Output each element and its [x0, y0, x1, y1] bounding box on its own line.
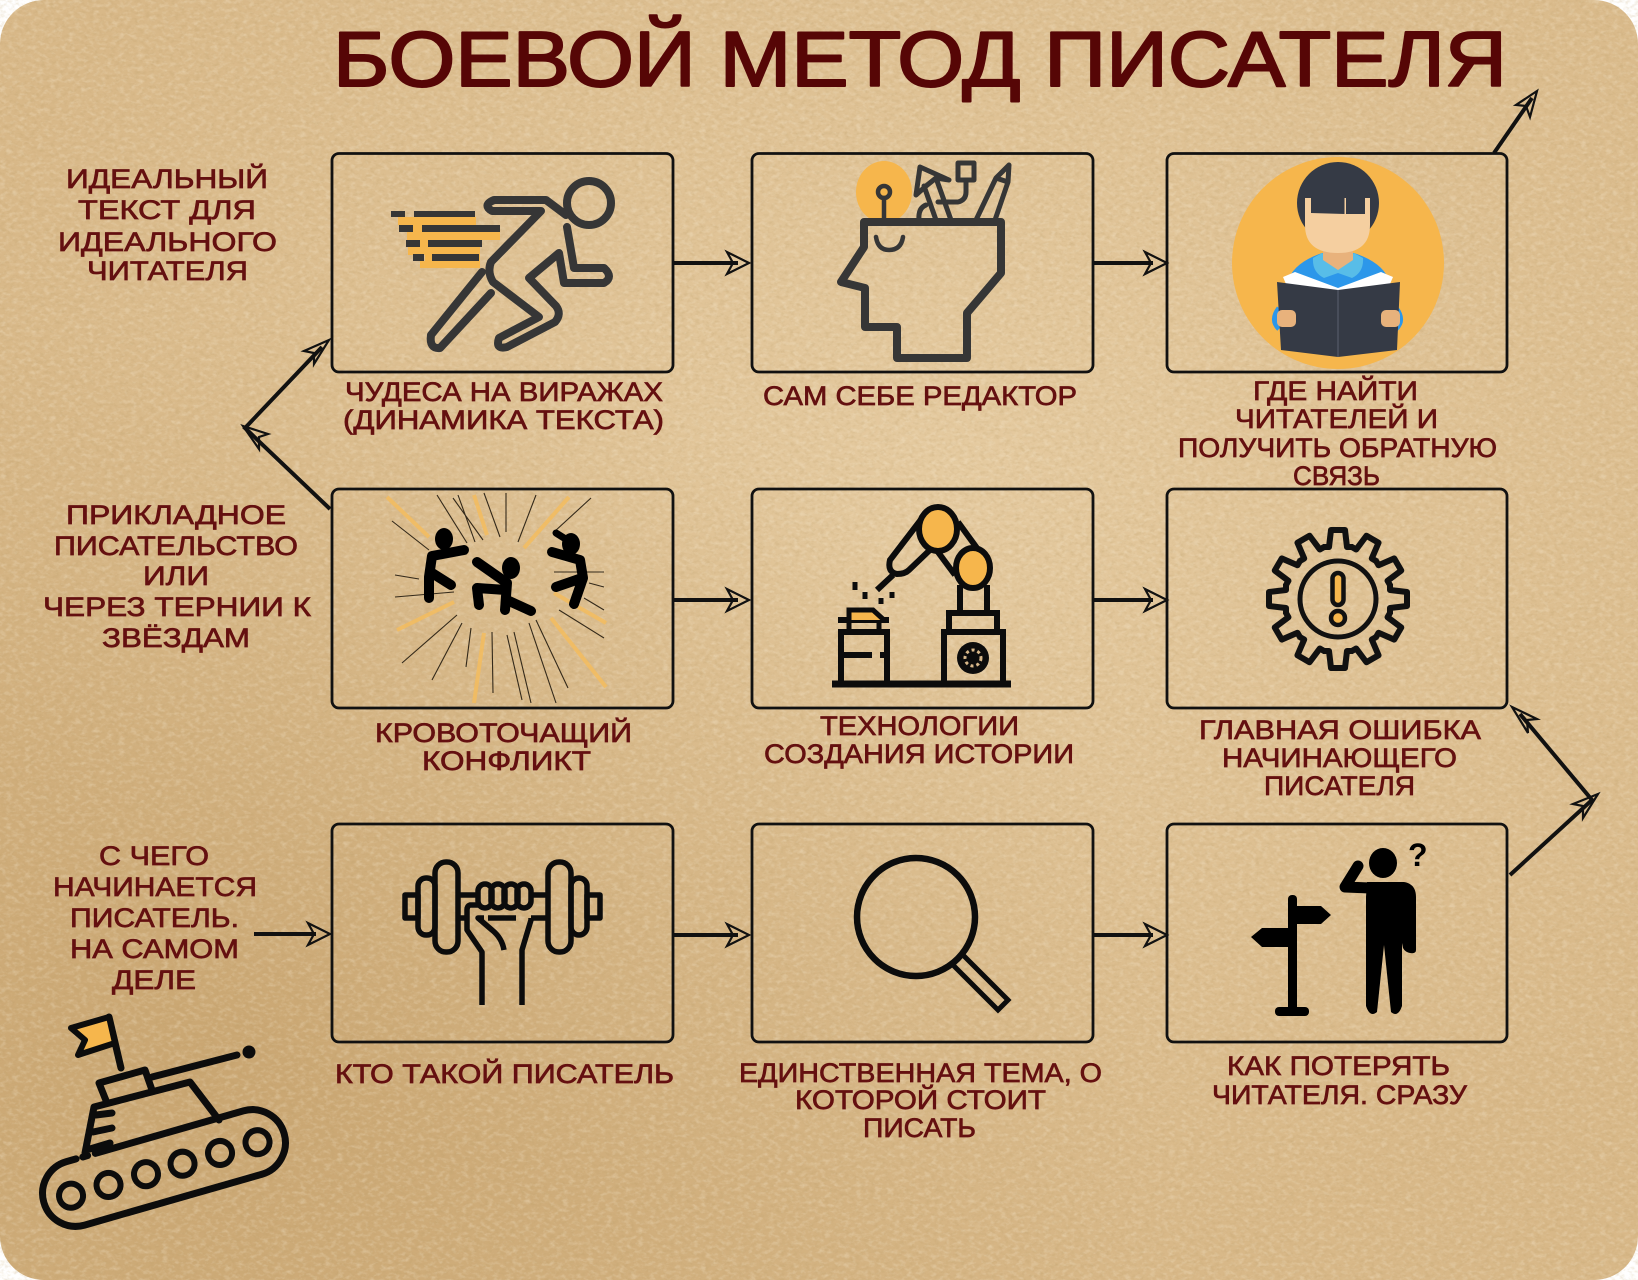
text: left label row 1: ИДЕАЛЬНЫЙ — [66, 163, 268, 194]
captions row 1: (ДИНАМИКА ТЕКСТА) — [343, 405, 664, 435]
title: БОЕВОЙ МЕТОД ПИСАТЕЛЯ — [333, 15, 1507, 103]
text: left label row 3: НА САМОМ — [70, 934, 239, 964]
captions row 3: ЧИТАТЕЛЯ. СРАЗУ — [1212, 1080, 1468, 1110]
captions row 2: КОНФЛИКТ — [422, 746, 591, 776]
captions row 2: ТЕХНОЛОГИИ — [820, 711, 1019, 741]
panel: чудеса на виражах — [332, 154, 673, 372]
icon: reader — [1232, 157, 1444, 369]
panel: кровоточащий конфликт — [332, 489, 673, 708]
text: left label row 2: ПРИКЛАДНОЕ — [66, 500, 286, 530]
panel: где найти читателей — [1167, 154, 1507, 372]
panel: как потерять читателя — [1167, 824, 1507, 1042]
text: left label row 2: ЧЕРЕЗ ТЕРНИИ К — [43, 592, 311, 622]
text: left label row 2: ИЛИ — [143, 561, 209, 591]
text: left label row 1: ТЕКСТ ДЛЯ — [78, 195, 256, 225]
text: left label row 2: ЗВЁЗДАМ — [102, 623, 250, 653]
icon: head with tools — [841, 161, 1009, 358]
captions row 2: НАЧИНАЮЩЕГО — [1222, 743, 1457, 773]
captions row 3: ПИСАТЬ — [863, 1113, 976, 1143]
text: left label row 3: НАЧИНАЕТСЯ — [53, 872, 257, 902]
question mark: ? — [1408, 837, 1428, 873]
captions row 1: САМ СЕБЕ РЕДАКТОР — [763, 381, 1077, 411]
text: left label row 2: ПИСАТЕЛЬСТВО — [54, 531, 298, 561]
captions row 3: КТО ТАКОЙ ПИСАТЕЛЬ — [335, 1058, 674, 1089]
text: left label row 3: С ЧЕГО — [99, 841, 209, 871]
panel: единственная тема — [752, 824, 1093, 1042]
captions row 3: ЕДИНСТВЕННАЯ ТЕМА, О — [739, 1058, 1102, 1088]
captions row 1: ЧУДЕСА НА ВИРАЖАХ — [345, 377, 663, 407]
arrows: upward link from row 3 to row 2 — [1510, 707, 1598, 875]
captions row 1: СВЯЗЬ — [1293, 461, 1380, 491]
captions row 1: ГДЕ НАЙТИ — [1253, 375, 1418, 406]
text: left label row 2 — [43, 500, 311, 653]
icon: running man — [391, 181, 611, 348]
captions row 2: КРОВОТОЧАЩИЙ — [375, 717, 632, 748]
panel: главная ошибка — [1167, 489, 1507, 708]
captions row 2: СОЗДАНИЯ ИСТОРИИ — [764, 739, 1074, 769]
captions row 2 — [375, 711, 1481, 801]
text: left label row 3: ДЕЛЕ — [112, 965, 196, 995]
panel: кто такой писатель — [332, 824, 673, 1042]
captions row 3: КОТОРОЙ СТОИТ — [795, 1084, 1046, 1115]
arrows: upward link from row 2 to row 1 — [243, 340, 330, 509]
text: left label row 1: ИДЕАЛЬНОГО — [58, 227, 277, 257]
icon: magnifying glass — [857, 858, 1008, 1010]
text: left label row 1: ЧИТАТЕЛЯ — [87, 256, 248, 286]
arrows: horizontal connectors — [254, 252, 1167, 946]
icon: signpost and confused man — [1251, 837, 1428, 1016]
icon: gear with exclamation mark — [1269, 530, 1407, 668]
arrow: to the title — [1494, 91, 1537, 153]
icon: fist with dumbbell — [405, 862, 600, 1005]
icon: fighting figures with rays — [387, 493, 606, 703]
text: left label row 3: ПИСАТЕЛЬ. — [70, 903, 239, 933]
captions row 1: ПОЛУЧИТЬ ОБРАТНУЮ — [1178, 433, 1497, 463]
text: left label row 1 — [58, 163, 277, 286]
icon: robot arm — [832, 507, 1011, 684]
captions row 1: ЧИТАТЕЛЕЙ И — [1235, 403, 1438, 434]
icon: tank — [35, 1017, 293, 1234]
captions row 1 — [343, 375, 1497, 491]
captions row 3: КАК ПОТЕРЯТЬ — [1227, 1051, 1450, 1081]
panel: сам себе редактор — [752, 154, 1093, 372]
captions row 2: ПИСАТЕЛЯ — [1264, 771, 1415, 801]
captions row 3 — [335, 1051, 1468, 1143]
panel: технологии создания истории — [752, 489, 1093, 708]
captions row 2: ГЛАВНАЯ ОШИБКА — [1199, 715, 1481, 745]
text: left label row 3 — [53, 841, 257, 995]
